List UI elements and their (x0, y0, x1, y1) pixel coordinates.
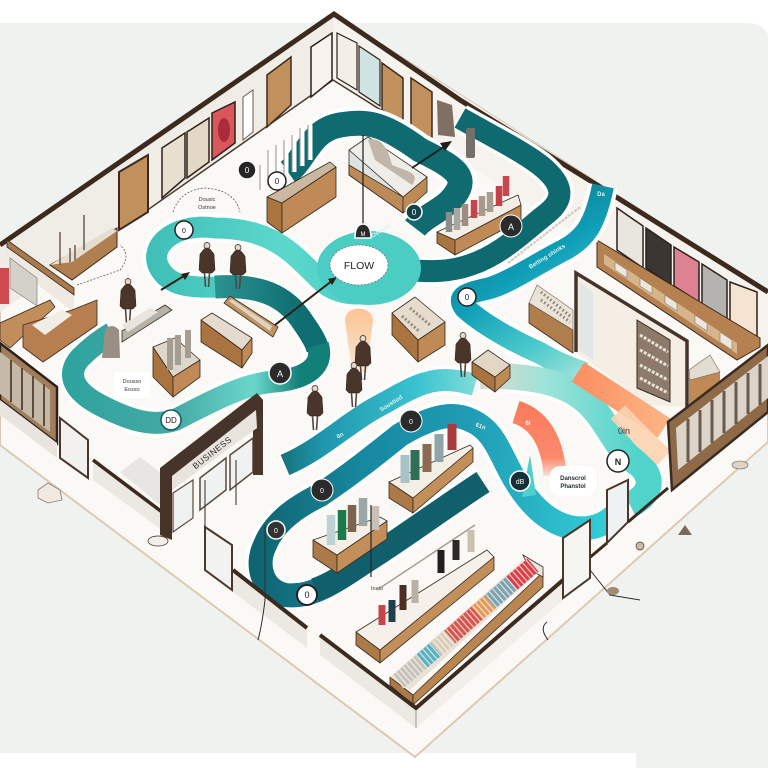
marker: pale teal (607, 450, 629, 472)
back right wall (333, 14, 768, 355)
outer tag left (38, 483, 62, 503)
small door right of entrance (205, 527, 232, 590)
small door left (60, 418, 88, 478)
rail (377, 525, 475, 590)
path label: blue band: Soustiod (379, 395, 404, 413)
door: right wall 1 (382, 63, 403, 125)
entrance portal (160, 393, 263, 540)
marker: near counter 1: 0 (245, 166, 250, 175)
counter: lower left with clothes (313, 498, 387, 577)
counter: long fabric table (390, 555, 543, 705)
marker: lower bottom (297, 585, 317, 605)
outer tag circle (636, 542, 644, 550)
flow path: large u-turn band (261, 416, 615, 595)
room counter top (689, 355, 720, 380)
marker: near counter 2: 0 (275, 177, 280, 186)
bottom white band (0, 753, 636, 768)
marker: dark path end: 0 (412, 208, 417, 217)
person: center 1 (355, 336, 371, 380)
wall trim (0, 14, 768, 292)
fabric stripes (398, 565, 533, 682)
marker: above flow (355, 224, 371, 238)
label: dashed arc (173, 188, 240, 212)
art panel: stripes white (617, 208, 643, 268)
flow path: central light teal (157, 227, 405, 294)
art panel: corner right (337, 33, 357, 90)
sign text: BUSINESS (191, 434, 234, 471)
path label: dark band: Dis (390, 501, 402, 511)
art panel: cream (730, 282, 757, 338)
art panel: red (212, 102, 235, 160)
flow path: blue middle band (285, 380, 475, 465)
marker: u-turn left (311, 479, 333, 501)
marker: u-turn top: 0 (409, 419, 413, 426)
room counter (689, 372, 720, 407)
hanging coat (102, 326, 120, 358)
arrow: from display to rack (412, 141, 452, 168)
counter: long rack (356, 525, 494, 663)
markers (161, 161, 629, 605)
right window wall (668, 345, 768, 490)
stripe separators (398, 565, 533, 682)
wall shelf: left room (50, 215, 117, 280)
marker: dark path end (406, 204, 422, 220)
marker: right path: 0 (465, 293, 470, 302)
counter: u-turn middle with clothes (389, 424, 473, 513)
person: upper loop left (199, 242, 215, 287)
door: upper left wall (267, 57, 291, 127)
counter: clothing rack right (437, 176, 521, 255)
marker: u-turn top (400, 410, 422, 432)
counter: clothes stand (153, 330, 200, 397)
right glass door (563, 480, 668, 598)
marker: pale teal: N (615, 457, 621, 467)
art panel: light pattern (187, 118, 209, 178)
counter: center display (392, 297, 445, 362)
path label: u-turn: 61n (474, 422, 487, 432)
path label: right band: Betting ohinks (528, 243, 567, 271)
shelving lines (640, 335, 668, 393)
marker: lower left: 0 (274, 528, 278, 535)
flow path: coral arc (516, 412, 555, 475)
person: upper loop right (230, 244, 246, 289)
left wall doors and art (119, 33, 332, 230)
flow path: lower dark band (315, 482, 483, 590)
flow path: lower left loop (73, 333, 319, 423)
top white band (0, 0, 768, 35)
right wall run (563, 543, 607, 580)
arrow: tray to flow node (275, 277, 337, 325)
flow node ring (317, 231, 421, 305)
marker: near counter 1 (238, 161, 256, 179)
arrowhead on u-turn (522, 455, 536, 497)
label: pale dotted lead between bands (508, 207, 580, 263)
shelving display (637, 320, 670, 402)
marker: near counter 2 (268, 172, 286, 190)
marker: lower loop: DD (165, 416, 177, 425)
outer tag middle (148, 536, 168, 546)
shop room frame (575, 273, 720, 407)
person: at display (455, 332, 471, 377)
marker: right path (458, 288, 476, 306)
path label: peach: 0in (618, 426, 630, 436)
right post (253, 402, 263, 475)
marker: upper loop (175, 221, 193, 239)
labels on paths (77, 188, 630, 592)
text: upper left note line 2: Ostnoe (198, 205, 216, 211)
text: upper left note: Dousic (199, 197, 216, 203)
oval note right (550, 466, 596, 496)
text: left note: Dousso (123, 379, 141, 385)
marker: u-turn right: dB (516, 479, 525, 486)
marker: above flow: M (360, 232, 366, 238)
partition: left room (0, 240, 74, 312)
folded goods (368, 139, 415, 185)
art panel: corner left (311, 33, 332, 97)
outer tag right (607, 587, 619, 595)
right wall doors and art (337, 33, 757, 338)
counter: room front (529, 285, 573, 353)
tray: accessories (224, 296, 278, 337)
path label: teal above flow: Oseand (371, 223, 393, 240)
column: right aisle (466, 128, 475, 158)
curtains (0, 268, 9, 304)
pole (370, 505, 372, 577)
outer tag cone (678, 525, 692, 535)
left post (160, 468, 172, 540)
door: left wall (119, 155, 148, 230)
art panel: pink (674, 247, 699, 302)
flow path: upper right dark teal (410, 118, 559, 271)
flow path: peach drop below flow node (345, 309, 373, 372)
counter: top left counter (260, 125, 336, 233)
glass partition (579, 282, 593, 360)
lead lines (205, 460, 640, 640)
path label: band number: 6n (336, 432, 345, 440)
path halos (73, 118, 649, 595)
text: sign lower: Inatit (371, 586, 383, 592)
flow path: pale teal arc (480, 376, 649, 505)
back left wall (0, 14, 334, 312)
flow oval: FLOW (344, 260, 374, 272)
art panel: grey (702, 264, 727, 320)
text: right note line 2: Phanstol (560, 484, 586, 490)
text: left note line 2: Eosso (124, 387, 140, 393)
path label: coral: 6l (525, 421, 531, 427)
text: flow note (114, 372, 150, 398)
pole to marker (362, 135, 364, 226)
sign (172, 410, 257, 490)
flow path: central dark curve (215, 287, 318, 352)
outer tag far right (732, 461, 748, 469)
person: aisle (307, 386, 323, 430)
hanging clothes: back wall (437, 100, 455, 137)
marker: right counter (500, 215, 522, 237)
door: right wall 2 (411, 78, 432, 142)
front left wall lower (233, 570, 563, 728)
marker: lower left (267, 521, 285, 539)
clothes (449, 176, 506, 232)
garment rail (262, 125, 310, 190)
flow oval (330, 245, 388, 285)
marker: upper loop: 0 (182, 228, 186, 235)
art panel: beige pattern (162, 133, 185, 198)
wall base line (119, 80, 432, 230)
text: right note: Danscrol (560, 476, 586, 482)
counter: glass display (349, 137, 427, 213)
marker: central figure: A (277, 369, 283, 379)
path label: top right: Da (597, 192, 605, 198)
marker: u-turn right (510, 471, 530, 491)
flow path: peach band (618, 412, 664, 458)
front wall by entrance (93, 457, 162, 530)
white column (243, 90, 253, 140)
flow path: right blue to pale teal (462, 186, 603, 373)
outer markers (38, 461, 748, 595)
label: dashed lead (77, 245, 126, 285)
counter: center left (201, 313, 252, 368)
counter: small cube (472, 350, 510, 392)
marker: u-turn left: 0 (320, 488, 324, 495)
counter: left wood low (0, 300, 97, 362)
marker: lower loop (161, 410, 181, 430)
person: left (120, 278, 136, 323)
marker: lower bottom: 0 (304, 590, 310, 600)
display rail: left table (102, 305, 172, 358)
person: center 2 (346, 362, 362, 407)
flow path: orange band (578, 372, 664, 428)
wall shelf: right wall (597, 240, 760, 360)
arrow: upper loop (161, 272, 190, 290)
marker: right counter: A (508, 222, 514, 232)
flow path: upper dark teal (288, 123, 460, 228)
art panel: blue (359, 46, 380, 106)
art panel: black (646, 228, 671, 285)
art panel: red centre (218, 118, 230, 142)
marker: central figure (269, 362, 291, 384)
grey curtain (10, 258, 37, 306)
left window wall (0, 343, 57, 458)
doors (173, 480, 193, 532)
header (160, 393, 263, 490)
